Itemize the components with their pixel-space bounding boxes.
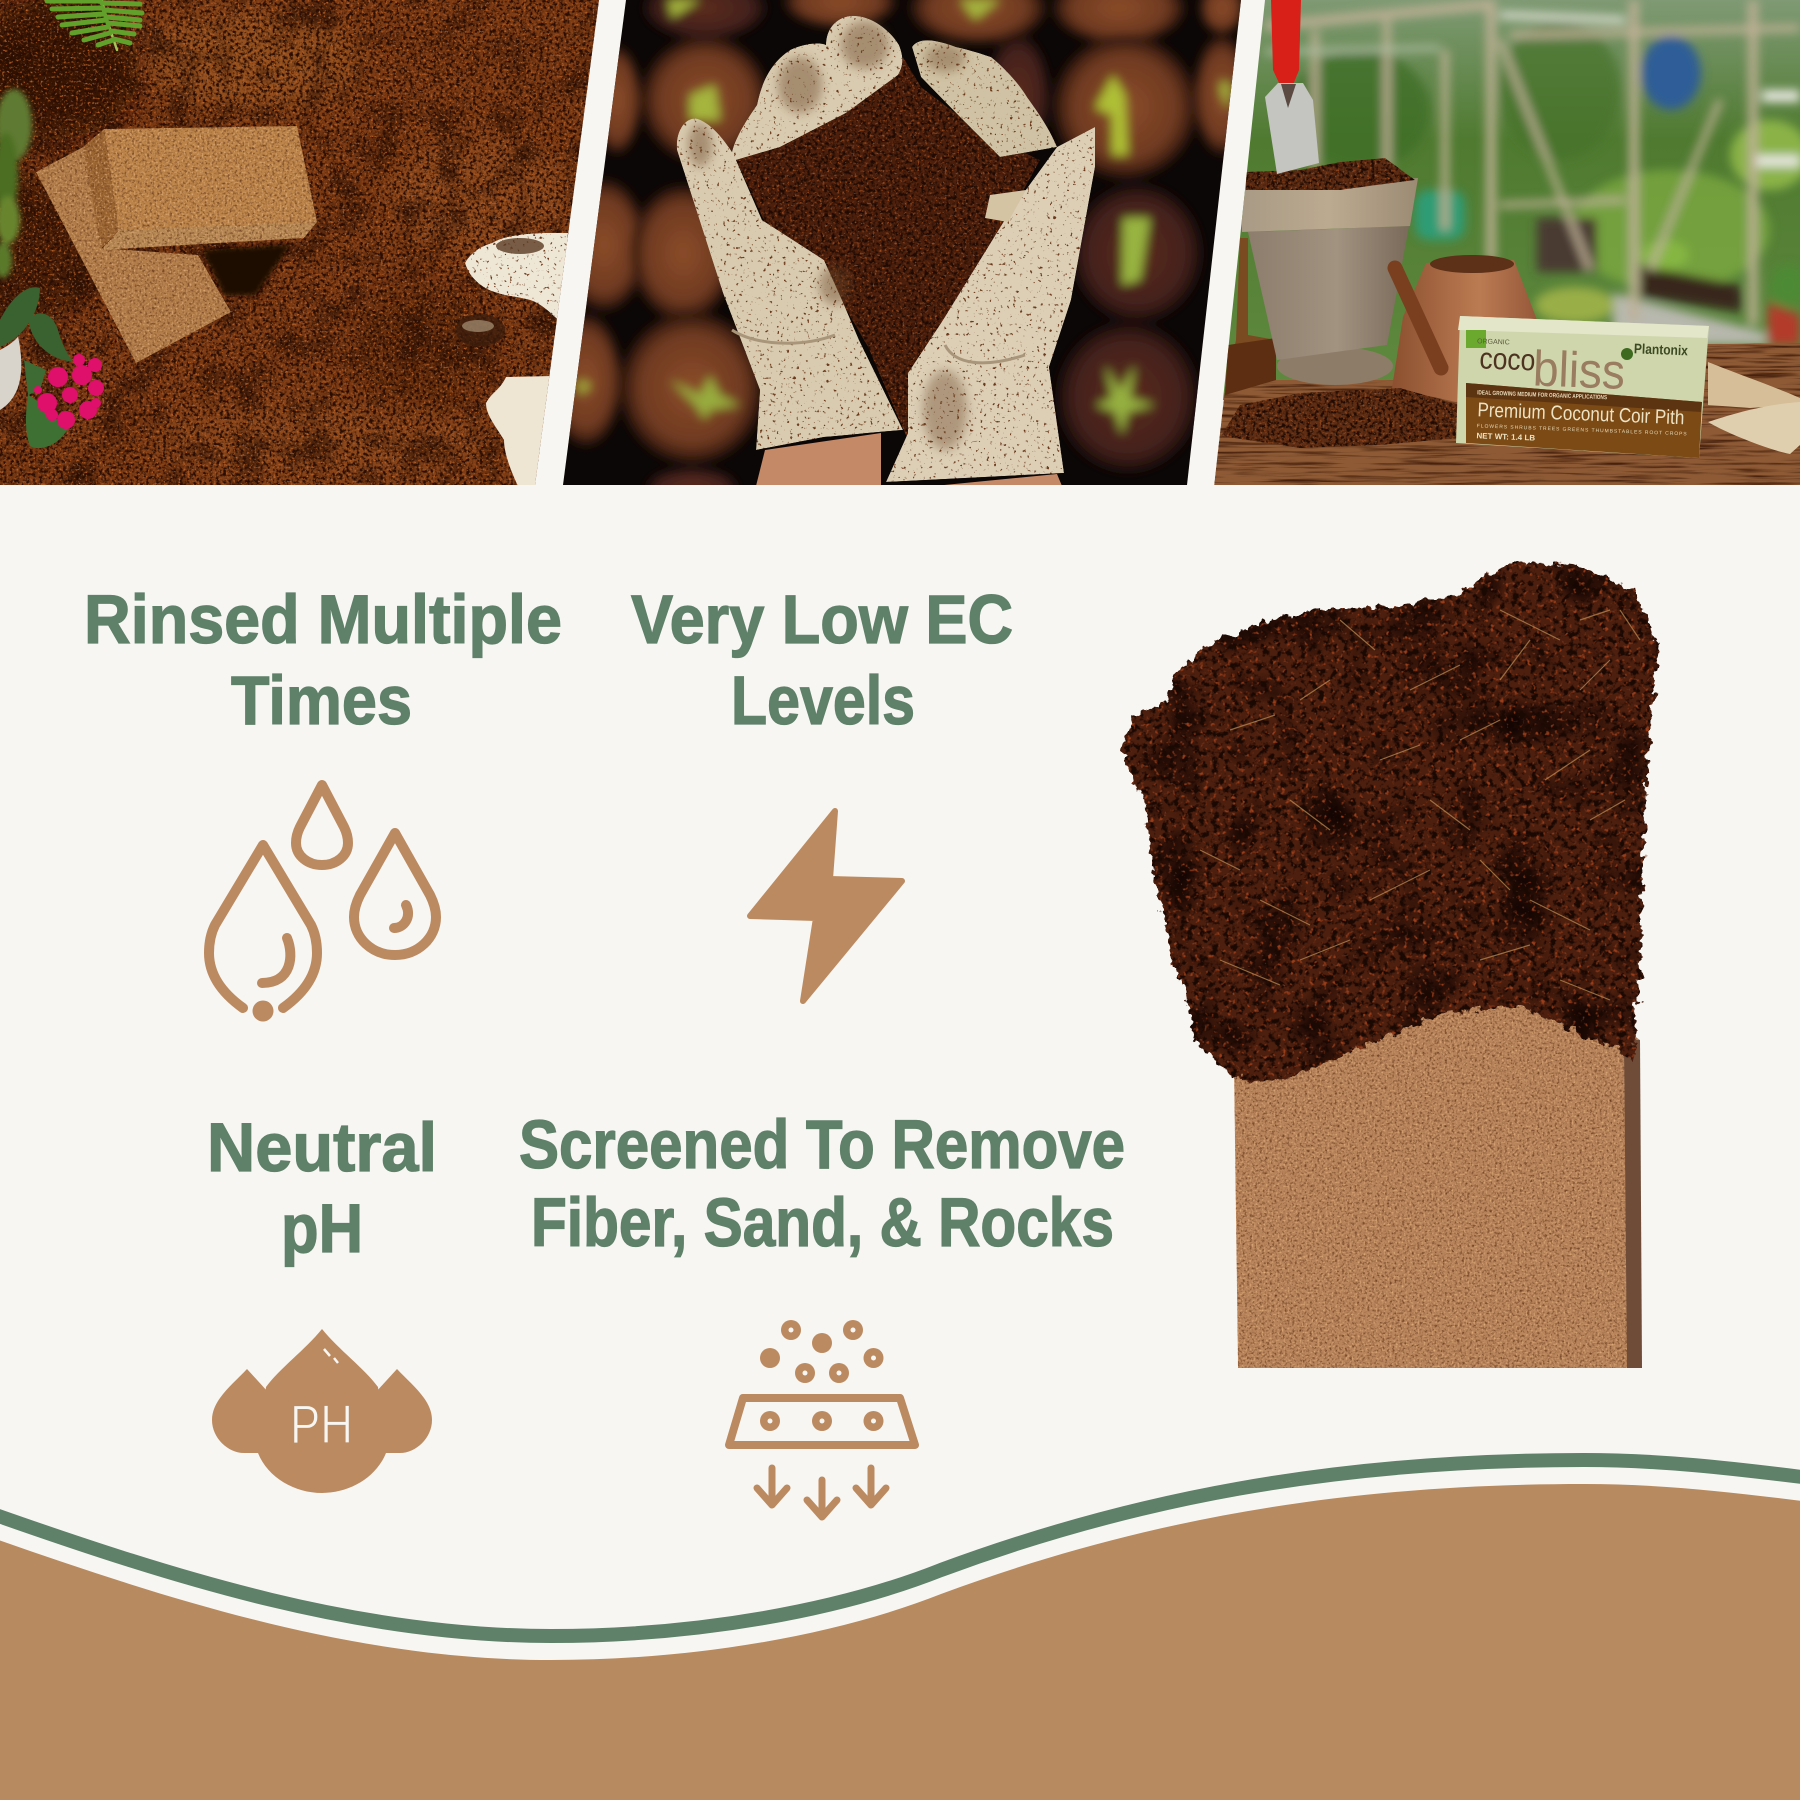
box labels: bliss	[1532, 340, 1626, 400]
heading: Rinsed Multiple Times: Times	[231, 662, 412, 739]
lower coir brick	[36, 146, 231, 363]
heading: Neutral pH	[207, 1109, 437, 1267]
box labels: NET WT: 1.4 LB	[1476, 431, 1535, 443]
wave: green stripe	[0, 1460, 1800, 1636]
soil pile	[1221, 388, 1460, 448]
photo: coco bliss product in greenhouse	[1210, 0, 1800, 486]
right glove	[886, 40, 1095, 482]
seedlings	[578, 0, 1230, 435]
heading: Screened To Remove Fiber, Sand, & Rocks	[519, 1106, 1125, 1261]
box labels: coco	[1479, 342, 1536, 377]
left glove	[677, 16, 903, 450]
heading: Very Low EC Levels: Levels	[731, 662, 915, 739]
blurred greenhouse background	[1265, 0, 1800, 345]
product box	[1456, 316, 1709, 458]
heading: Neutral pH: Neutral	[207, 1109, 437, 1186]
heading: Neutral pH: pH	[281, 1190, 363, 1267]
heading: Very Low EC Levels	[631, 581, 1013, 739]
fern	[47, 0, 142, 50]
heading: Screened To Remove Fiber, Sand, & Rocks: Fiber, Sand, & Rocks	[531, 1184, 1114, 1261]
compressed brick	[1234, 990, 1642, 1368]
heading: Screened To Remove Fiber, Sand, & Rocks: Screened To Remove	[519, 1106, 1125, 1183]
heading: Very Low EC Levels: Very Low EC	[631, 581, 1013, 658]
wave: brown footer band	[0, 1484, 1800, 1800]
coir brick with expanded coir on top	[1121, 562, 1659, 1368]
shadow under bricks	[202, 244, 292, 296]
photo: gloved hands holding coir over seedling pots	[550, 0, 1250, 504]
gloved hand upper	[455, 233, 568, 346]
box labels: ORGANIC	[1477, 338, 1510, 347]
box labels	[1473, 334, 1691, 448]
box labels: Premium Coconut Coir Pith	[1477, 399, 1685, 429]
icon: water drops	[209, 785, 436, 1022]
heading: Rinsed Multiple Times	[84, 581, 562, 739]
gloved hand lower	[486, 376, 552, 486]
coir brick on table	[1225, 238, 1276, 395]
icon: pH drop: PH	[290, 1393, 353, 1455]
dark leaves	[0, 287, 73, 448]
box labels: IDEAL GROWING MEDIUM FOR ORGANIC APPLICATIONS	[1477, 390, 1607, 401]
trowel	[1265, 0, 1319, 174]
saucer	[1277, 347, 1393, 385]
box labels: Plantonix	[1634, 340, 1688, 358]
box labels: FLOWERS SHRUBS TREES GREENS THUMBSTABLES ROOT CROPS	[1477, 423, 1687, 437]
upper coir brick	[83, 126, 317, 250]
icon: pH drop	[212, 1329, 432, 1493]
heading: Rinsed Multiple Times: Rinsed Multiple	[84, 581, 562, 658]
gardening gloves	[1708, 362, 1800, 454]
terracotta pot	[1241, 178, 1418, 360]
pink flowers	[34, 354, 104, 429]
coir fibres	[1200, 610, 1640, 1000]
coir handful	[736, 57, 1040, 440]
blurred seedling pots	[550, 0, 1250, 504]
loose coir	[1121, 562, 1659, 1083]
forearm	[756, 433, 881, 486]
wooden table	[1214, 343, 1800, 486]
photo: coir bricks on soil	[0, 0, 600, 486]
fuzzy plant	[0, 89, 32, 278]
pot soil	[1246, 158, 1415, 190]
icon: lightning bolt	[750, 811, 902, 1001]
icon: sieve with falling particles	[729, 1320, 915, 1517]
white pot	[0, 336, 21, 410]
copper watering can	[1392, 255, 1537, 402]
